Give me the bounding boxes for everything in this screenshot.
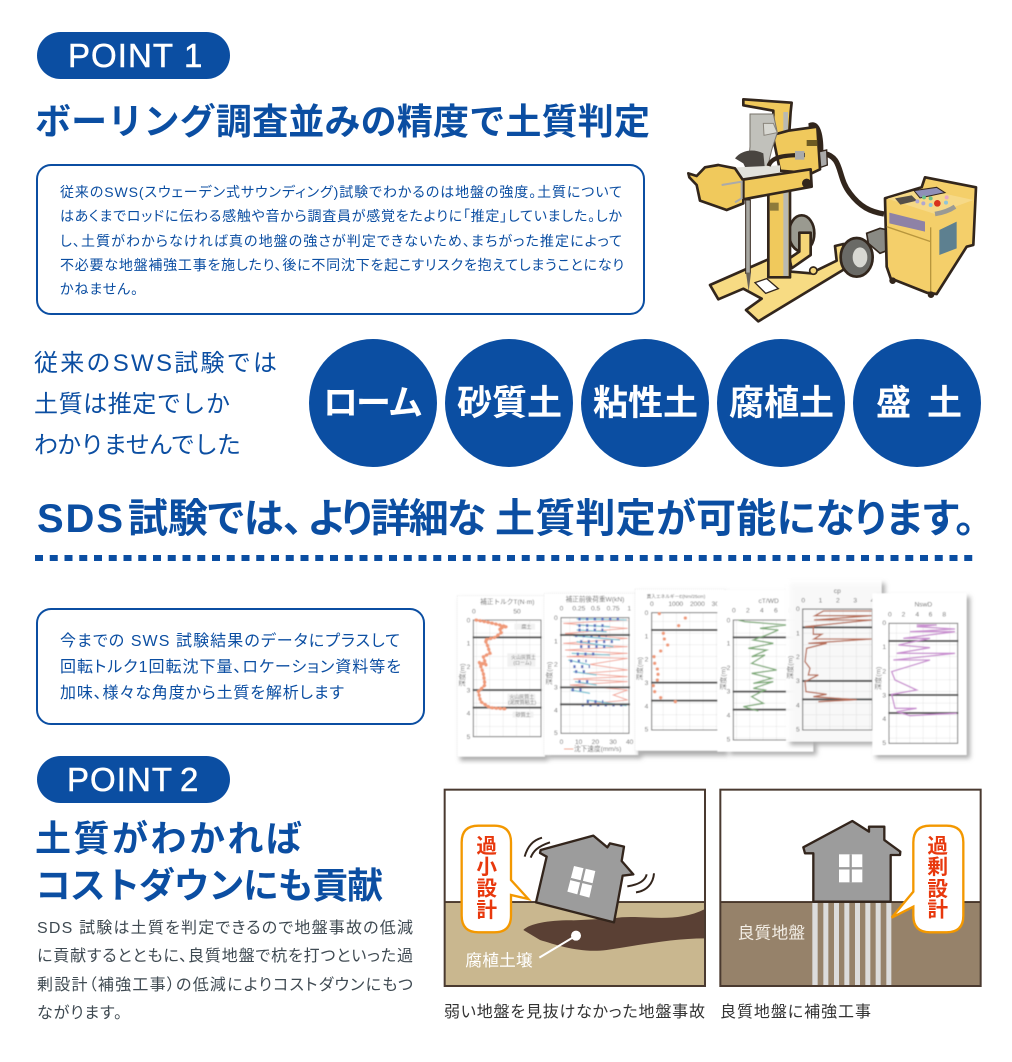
panel: explanation of SWS test: し、土質がわからなければ真の地盤の強さが判定できないため、まちがった推定によって xyxy=(60,233,622,249)
chart: cp: 1 xyxy=(819,597,823,604)
chart: Nsw/D: 6 xyxy=(929,611,933,618)
badge: POINT 2: POINT xyxy=(67,761,172,798)
chart: Nsw/D: 2 xyxy=(902,611,906,618)
chart: corrected torque: 0 xyxy=(467,617,471,624)
chart: Nsw/D: 5 xyxy=(882,740,886,747)
chart: corrected torque: 砂質土 xyxy=(516,711,531,718)
callout: 過小設計: 計 xyxy=(476,899,497,922)
chart: cT/WD: 深度(m) xyxy=(718,667,727,690)
icon: house on piles xyxy=(803,821,900,902)
chart: cT/WD: 1 xyxy=(727,641,731,648)
chart: load and settlement speed: 0 xyxy=(560,739,564,746)
chart: load and settlement speed: 深度(m) xyxy=(544,662,553,685)
soil type circle: 砂質土: 砂質土 xyxy=(457,384,562,423)
chart: load and settlement speed: 0 xyxy=(560,606,564,613)
text: point 2 description xyxy=(37,919,413,1022)
heading: SDS test detail: 試験では、 xyxy=(128,497,303,541)
heading: SDS test detail: SDS xyxy=(37,497,123,541)
chart: penetration energy: 貫入エネルギーE(Nm/25cm) xyxy=(647,593,706,600)
text: conventional SWS limitation xyxy=(34,350,277,459)
chart: penetration energy: 4 xyxy=(645,703,649,710)
soil type circle: ローム xyxy=(309,339,437,467)
chart: cT/WD: 3 xyxy=(727,689,731,696)
chart: cp: 2 xyxy=(836,597,840,604)
soil type circle: 盛土: 盛 土 xyxy=(876,384,962,423)
chart: corrected torque: 火山灰質土 xyxy=(511,654,536,661)
panel: explanation of SWS test: かねません。 xyxy=(60,281,138,297)
callout: 過剰設計: 剰 xyxy=(927,856,948,879)
chart: Nsw/D: 0 xyxy=(882,620,886,627)
badge: POINT 2: 2 xyxy=(180,761,198,798)
chart: cT/WD: 0 xyxy=(732,608,736,615)
chart: cp: 深度(m) xyxy=(786,656,795,679)
chart: cT/WD: 6 xyxy=(774,608,778,615)
heading: point 1: ボーリング調査並みの精度で土質判定 xyxy=(35,101,650,142)
chart: Nsw/D: 1 xyxy=(882,644,886,651)
chart: load and settlement speed: 30 xyxy=(609,739,617,746)
chart: cp: 3 xyxy=(853,597,857,604)
soil type circle: 粘性土 xyxy=(581,339,709,467)
chart: cT/WD xyxy=(717,590,817,755)
panel: SDS analysis xyxy=(37,609,424,724)
chart: corrected torque: 50 xyxy=(513,609,521,616)
soil type circle: 粘性土: 粘性土 xyxy=(593,384,698,423)
chart: load and settlement speed: 5 xyxy=(554,730,558,737)
badge: POINT 1 xyxy=(37,32,230,79)
soil type circle: 腐植土 xyxy=(717,339,845,467)
panel: SDS analysis: 加味、様々な角度から土質を解析します xyxy=(60,684,344,702)
text: point 2 description: に貢献するとともに、良質地盤で杭を打つといった過 xyxy=(37,947,413,965)
chart: penetration energy: 3 xyxy=(645,680,649,687)
callout: 過小設計: 小 xyxy=(476,856,497,879)
badge: POINT 1: POINT xyxy=(68,37,173,74)
chart: penetration energy xyxy=(635,589,728,756)
chart: corrected torque: 腐土 xyxy=(521,623,531,630)
illustration: under-design, weak ground accident: 腐植土壌 xyxy=(465,951,533,970)
chart: Nsw/D: 深度(m) xyxy=(874,667,883,690)
chart collage: SDS test result graphs xyxy=(457,580,970,761)
illustration: under-design, weak ground accident xyxy=(445,790,705,986)
text: point 2 description: SDS 試験は土質を判定できるので地盤事故の低減 xyxy=(37,919,413,937)
chart: load and settlement speed: 40 xyxy=(626,739,634,746)
chart: cp xyxy=(786,580,885,745)
chart: load and settlement speed: 0 xyxy=(554,615,558,622)
text: conventional SWS limitation: 従来のSWS試験では xyxy=(34,350,277,377)
caption: ground accident: 弱い地盤を見抜けなかった地盤事故 xyxy=(444,1003,705,1021)
chart: penetration energy: 5 xyxy=(645,727,649,734)
chart: Nsw/D xyxy=(872,593,970,758)
chart: Nsw/D: 0 xyxy=(888,611,892,618)
text: point 2 description: 剰設計（補強工事）の低減によりコストダウンにもつ xyxy=(37,976,413,994)
chart: cp: 0 xyxy=(796,606,800,613)
heading: SDS test detail: 土質判定が可能になります。 xyxy=(495,497,975,541)
chart: load and settlement speed: 1 xyxy=(627,606,631,613)
chart: Nsw/D: 2 xyxy=(882,668,886,675)
callout: 過小設計: 過 xyxy=(476,835,497,858)
chart: load and settlement speed: 0.5 xyxy=(591,606,601,613)
chart: corrected torque: 補正トルクT(N·m) xyxy=(480,597,535,606)
chart: load and settlement speed: 10 xyxy=(575,739,583,746)
chart: cT/WD: cT/WD xyxy=(758,598,779,605)
chart: Nsw/D: 4 xyxy=(915,611,919,618)
callout: 過剰設計: 計 xyxy=(927,899,948,922)
heading: SDS test detail: より詳細な xyxy=(308,497,486,541)
chart: cT/WD: 2 xyxy=(727,665,731,672)
chart: penetration energy: 1 xyxy=(645,633,649,640)
chart: corrected torque xyxy=(457,596,548,761)
chart: load and settlement speed: 3 xyxy=(554,684,558,691)
chart: corrected torque: (泥炭質粘土) xyxy=(508,699,537,706)
panel: explanation of SWS test: 従来のSWS(スウェーデン式サウンディング)試験でわかるのは地盤の強度。土質について xyxy=(60,184,622,200)
panel: explanation of SWS test: 不必要な地盤補強工事を施したり、後に不同沈下を起こすリスクを抱えてしまうことになり xyxy=(60,257,624,273)
chart: load and settlement speed: 0.25 xyxy=(572,606,586,613)
chart: corrected torque: 2 xyxy=(467,664,471,671)
chart: cp: 3 xyxy=(796,678,800,685)
chart: corrected torque: 1 xyxy=(467,641,471,648)
callout: 過剰設計: 設 xyxy=(927,878,948,901)
chart: corrected torque: (ローム) xyxy=(513,661,532,667)
chart: load and settlement speed: 沈下速度(mm/s) xyxy=(574,744,621,753)
chart: load and settlement speed: 4 xyxy=(554,707,558,714)
chart: cT/WD: 8 xyxy=(788,608,792,615)
chart: penetration energy: 2 xyxy=(645,657,649,664)
chart: corrected torque: 5 xyxy=(467,734,471,741)
chart: penetration energy: 3000 xyxy=(712,601,727,608)
chart: Nsw/D: 4 xyxy=(882,716,886,723)
panel: explanation of SWS test xyxy=(37,165,644,314)
chart: corrected torque: 火山灰質土 xyxy=(509,693,534,700)
chart: penetration energy: 0 xyxy=(645,610,649,617)
chart: penetration energy: 1000 xyxy=(668,601,683,608)
chart: load and settlement speed: 20 xyxy=(592,739,599,746)
callout: 過小設計: 設 xyxy=(476,877,497,900)
soil type circle: 腐植土: 腐植土 xyxy=(729,384,834,423)
badge: POINT 2 xyxy=(37,756,230,803)
chart: Nsw/D: 3 xyxy=(882,693,886,700)
chart: cp: 4 xyxy=(796,703,800,710)
chart: cp: 2 xyxy=(796,654,800,661)
chart: cT/WD: 0 xyxy=(727,617,731,624)
icon: tilted house xyxy=(525,836,654,922)
chart: corrected torque: 深度(m) xyxy=(458,663,467,687)
chart: penetration energy: 2000 xyxy=(690,601,705,608)
callout: 過剰設計 xyxy=(892,826,963,932)
chart: Nsw/D: 8 xyxy=(942,611,946,618)
soil type circle: ローム: ローム xyxy=(323,384,423,423)
illustration: over-design, reinforcement on good ground xyxy=(720,790,981,986)
soil type circle: 砂質土 xyxy=(445,339,573,467)
chart: load and settlement speed xyxy=(544,593,642,758)
heading: point 2 xyxy=(35,818,383,906)
text: point 2 description: ながります。 xyxy=(37,1004,122,1022)
chart: load and settlement speed: 0.75 xyxy=(607,606,620,613)
chart: load and settlement speed: 1 xyxy=(554,638,558,645)
chart: cT/WD: 4 xyxy=(727,713,731,720)
soil type circle: 盛土 xyxy=(853,339,981,467)
chart: Nsw/D: NswD xyxy=(914,602,932,609)
heading: SDS test detail xyxy=(37,497,975,541)
chart: cT/WD: 2 xyxy=(746,608,750,615)
panel: SDS analysis: 今までの SWS 試験結果のデータにプラスして xyxy=(60,631,400,650)
heading: point 2: コストダウンにも貢献 xyxy=(35,865,383,906)
chart: cp: 1 xyxy=(796,631,800,638)
chart: corrected torque: 3 xyxy=(467,687,471,694)
chart: load and settlement speed: 補正前後荷重W(kN) xyxy=(566,595,624,604)
illustration: over-design, reinforcement on good ground: 良質地盤 xyxy=(738,923,805,942)
callout: 過小設計 xyxy=(462,826,528,932)
chart: penetration energy: 0 xyxy=(650,601,654,608)
illustration: SWS drilling machine xyxy=(688,99,976,321)
chart: penetration energy: 深度(m) xyxy=(635,657,644,680)
chart: cT/WD: 5 xyxy=(727,737,731,744)
chart: cp: 4 xyxy=(871,597,875,604)
chart: cp: 0 xyxy=(801,597,805,604)
text: conventional SWS limitation: わかりませんでした xyxy=(34,432,241,459)
text: conventional SWS limitation: 土質は推定でしか xyxy=(34,391,230,418)
chart: corrected torque: 0 xyxy=(472,609,476,616)
panel: explanation of SWS test: はあくまでロッドに伝わる感触や音から調査員が感覚をたよりに「推定」していました。しか xyxy=(60,208,622,224)
badge: POINT 1: 1 xyxy=(184,37,202,74)
caption: reinforcement work: 良質地盤に補強工事 xyxy=(720,1003,871,1021)
panel: SDS analysis: 回転トルク1回転沈下量、ロケーション資料等を xyxy=(60,658,401,676)
chart: corrected torque: 4 xyxy=(467,711,471,718)
chart: cp: cp xyxy=(834,588,841,595)
chart: load and settlement speed: 2 xyxy=(554,662,558,669)
callout: 過剰設計: 過 xyxy=(927,835,948,858)
chart: cp: 5 xyxy=(796,727,800,734)
chart: cT/WD: 4 xyxy=(760,608,764,615)
heading: point 2: 土質がわかれば xyxy=(35,818,302,859)
